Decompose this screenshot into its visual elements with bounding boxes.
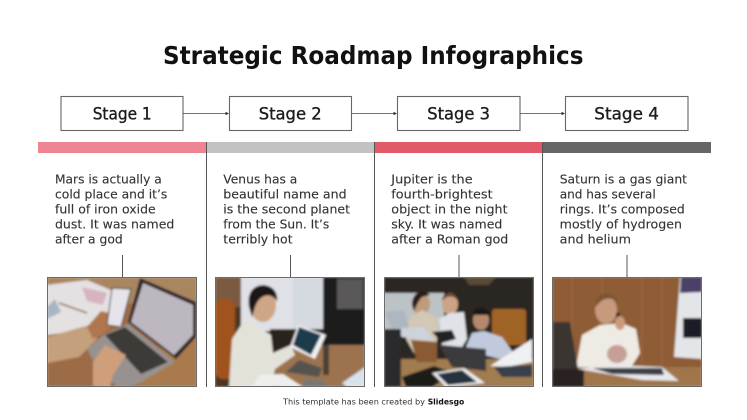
photo: woman holding tablet xyxy=(215,277,365,387)
text block: Venus: terribly hot xyxy=(223,231,293,246)
arrow: stage 1 to stage 2 xyxy=(183,112,229,115)
photo: hands using laptop and phone xyxy=(47,277,197,387)
text block: Saturn: rings. It’s composed xyxy=(560,201,685,216)
text block: Jupiter: after a Roman god xyxy=(391,231,508,246)
photo: woman on the phone xyxy=(552,277,702,387)
text block: Venus: Venus has a xyxy=(223,171,297,186)
title: Strategic Roadmap Infographics xyxy=(163,41,584,70)
text block: Venus: from the Sun. It’s xyxy=(223,216,329,231)
text block: Mars: full of iron oxide xyxy=(55,201,156,216)
text block: Saturn: and has several xyxy=(560,186,656,201)
text block: Mars: dust. It was named xyxy=(55,216,174,231)
text block: Saturn: and helium xyxy=(560,231,631,246)
arrow: stage 2 to stage 3 xyxy=(352,112,397,115)
footer credit: This template has been created by xyxy=(282,398,425,407)
text block: Mars: after a god xyxy=(55,231,123,246)
stage 3 box xyxy=(398,96,520,130)
text block: Mars: cold place and it’s xyxy=(55,186,167,201)
text block: Venus: beautiful name and xyxy=(223,186,347,201)
stage 2 box xyxy=(230,96,352,130)
text block: Jupiter: sky. It was named xyxy=(391,216,502,231)
text block: Jupiter: object in the night xyxy=(391,201,508,216)
footer credit: Slidesgo xyxy=(428,398,465,407)
text block: Mars: Mars is actually a xyxy=(55,171,162,186)
text block: Jupiter: fourth-brightest xyxy=(391,186,493,201)
connector lines xyxy=(122,255,627,277)
timeline bar xyxy=(38,142,711,153)
text block: Saturn: mostly of hydrogen xyxy=(560,216,682,231)
stage 4 box xyxy=(566,96,688,130)
text block: Jupiter: Jupiter is the xyxy=(390,171,473,186)
column dividers xyxy=(206,142,542,387)
photo: team of three at table xyxy=(384,277,534,387)
arrow: stage 3 to stage 4 xyxy=(520,112,565,115)
stage 1 box: Stage 1 xyxy=(93,104,152,123)
stage 4 box: Stage 4 xyxy=(594,104,659,123)
stage 1 box xyxy=(61,96,183,130)
text block: Saturn: Saturn is a gas giant xyxy=(560,171,687,186)
stage 2 box: Stage 2 xyxy=(259,104,322,123)
text block: Venus: is the second planet xyxy=(223,201,350,216)
stage 3 box: Stage 3 xyxy=(427,104,490,123)
